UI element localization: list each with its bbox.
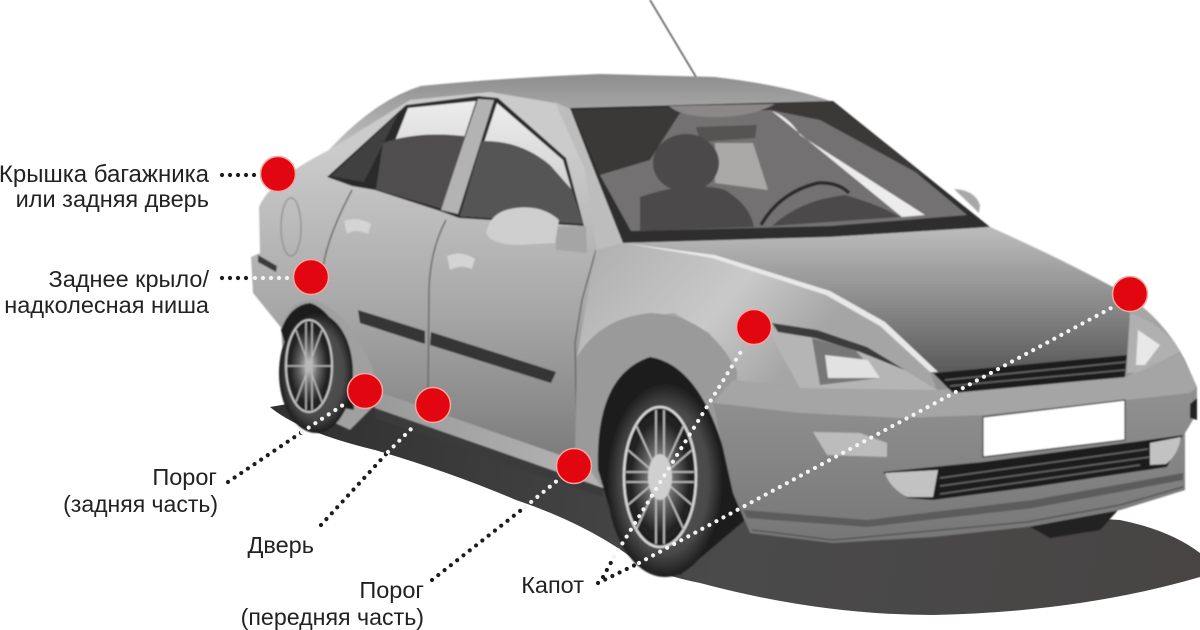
label: rear wing line 2: надколесная ниша <box>4 292 210 318</box>
lower grille <box>883 435 1183 500</box>
rear door window <box>376 101 476 208</box>
front window tinted interior <box>460 141 583 224</box>
right side marker <box>1190 398 1197 420</box>
ground shadow <box>270 385 1200 615</box>
front door window <box>460 103 581 223</box>
label: trunk lid: Крышка багажника <box>0 161 210 188</box>
windshield frame <box>570 101 990 243</box>
label: door: Дверь <box>247 532 314 558</box>
left headlight <box>772 323 937 390</box>
interior light patch <box>715 143 768 190</box>
marker: rear sill <box>348 374 382 408</box>
front rim <box>624 407 696 547</box>
rear wheel arch <box>281 300 380 430</box>
rear wheel <box>279 313 353 433</box>
front wing <box>577 243 937 390</box>
fog light housing <box>813 432 887 457</box>
rear bumper slot <box>258 255 277 272</box>
licence plate <box>983 400 1125 457</box>
car illustration <box>251 0 1197 577</box>
seat body <box>640 186 754 231</box>
hood <box>623 227 1130 373</box>
far side mirror <box>954 189 980 213</box>
window surround <box>327 96 584 226</box>
rear tyre <box>279 313 353 433</box>
rear quarter window <box>331 114 398 182</box>
front hub <box>648 454 672 500</box>
roof <box>329 74 833 150</box>
label: rear sill line 2: (задняя часть) <box>63 491 218 517</box>
seats and driver area <box>640 134 754 231</box>
door handles <box>344 219 475 270</box>
seat headrest <box>653 134 719 192</box>
label: trunk lid line 2: или задняя дверь <box>16 186 209 212</box>
windshield glass <box>600 109 967 231</box>
steering wheel <box>761 183 849 225</box>
label: rear sill: Порог <box>152 464 217 490</box>
rear spokes <box>287 322 331 410</box>
antenna <box>650 0 708 97</box>
dashboard <box>772 195 900 226</box>
a-pillar <box>555 102 623 250</box>
side sill <box>375 393 603 488</box>
windshield reflection <box>772 111 925 217</box>
upper grille <box>933 355 1127 393</box>
right headlight <box>1127 313 1180 373</box>
far side tyre <box>1027 508 1120 538</box>
front wheel arch <box>598 357 745 575</box>
marker: rear wing <box>294 260 328 294</box>
bumper top band <box>713 353 1197 418</box>
leaders over car <box>255 278 1113 563</box>
left fog lamp <box>885 470 938 497</box>
rear wheel arch inner <box>281 303 354 410</box>
visor <box>669 104 775 117</box>
b-pillar <box>441 99 494 214</box>
front tyre <box>607 383 723 577</box>
side mirror <box>486 207 559 245</box>
label: rear wing: Заднее крыло/ <box>49 266 209 292</box>
marker: hood <box>1112 276 1148 312</box>
bumper lower <box>713 393 1197 543</box>
side moulding <box>358 310 556 383</box>
right fog lamp <box>1150 437 1181 465</box>
rear window tinted interior <box>376 135 471 208</box>
rear fuel flap <box>281 198 301 256</box>
hood crease highlight <box>623 243 938 372</box>
car body silhouette <box>251 74 1197 543</box>
side mirror base <box>556 226 587 253</box>
windshield top band <box>572 102 930 180</box>
dotted leader lines <box>222 175 1113 583</box>
door seams <box>323 190 596 447</box>
marker: trunk lid <box>260 156 296 192</box>
front wheel <box>607 383 723 577</box>
front wheel arch flare <box>575 313 737 505</box>
label: front sill: Порог <box>359 577 424 603</box>
rear view mirror <box>696 125 757 142</box>
marker: front sill <box>556 448 592 484</box>
bumper lip line <box>752 487 1183 540</box>
label: hood: Капот <box>521 572 584 598</box>
label: front sill line 2: (передняя часть) <box>241 604 424 630</box>
bumper lip stripe <box>743 473 1183 527</box>
marker: front wing <box>736 310 772 344</box>
rear rim <box>286 320 332 412</box>
leaders outside car <box>222 175 639 583</box>
marker: door <box>416 388 450 422</box>
front spokes <box>626 410 694 544</box>
